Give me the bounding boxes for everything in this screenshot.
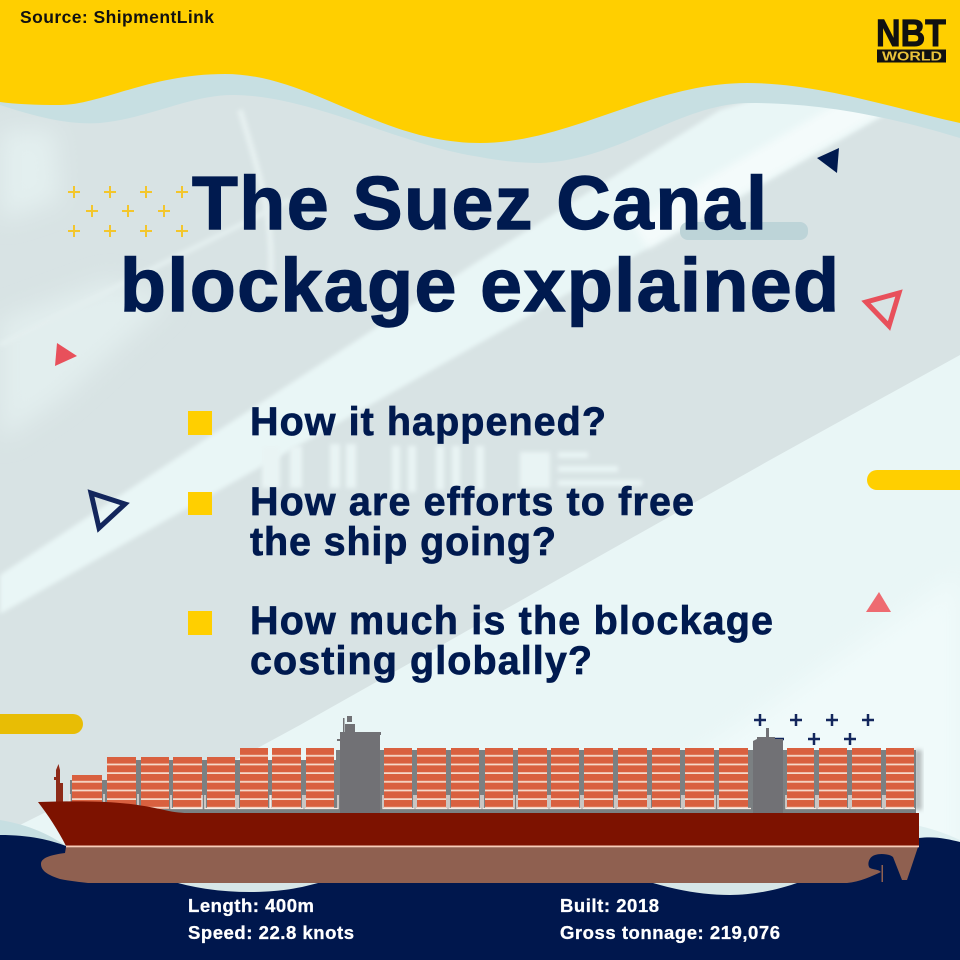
- deck base: [70, 750, 916, 813]
- navy sea: [0, 835, 960, 960]
- logo: NBT World: WORLD: [882, 50, 942, 64]
- bridge tower: [337, 716, 381, 813]
- container frames: [70, 794, 915, 808]
- decoration: yellow pill left: [0, 714, 83, 734]
- waterline: [66, 846, 919, 847]
- container stacks: [72, 748, 914, 809]
- logo: NBT World: NBT: [876, 13, 946, 55]
- source credit: Source: ShipmentLink: [20, 7, 214, 27]
- title: blockage explained: [120, 243, 839, 327]
- question 1: How it happened?: [250, 400, 606, 444]
- triangle: red outline right: [866, 293, 899, 326]
- decoration: yellow plus grid: [68, 186, 188, 237]
- triangle: red filled left: [55, 343, 77, 366]
- ship specs: Gross tonnage: 219,076: [560, 922, 780, 943]
- bow mast: [54, 764, 63, 802]
- ship shadow: [914, 750, 922, 810]
- lower hull: [41, 847, 918, 883]
- decoration: navy plus grid: [754, 714, 874, 745]
- decoration: teal pill: [680, 222, 808, 240]
- stern water splash: [915, 825, 960, 850]
- question 2: [188, 480, 694, 564]
- ship specs: Built: 2018: [560, 895, 659, 916]
- funnel tower: [753, 728, 783, 813]
- wake highlights under hull: [178, 883, 797, 895]
- question list: [188, 400, 773, 683]
- question 3: [188, 599, 773, 683]
- ship specs: Speed: 22.8 knots: [188, 922, 354, 943]
- teal wave under header: [0, 60, 960, 163]
- question 2: How are efforts to free: [250, 480, 694, 524]
- title: [120, 161, 839, 327]
- ship: [38, 716, 922, 883]
- triangle: navy filled top right: [817, 148, 839, 173]
- bow water splash: [0, 820, 66, 846]
- yellow header wave: [0, 0, 960, 143]
- triangle: red filled right: [866, 592, 891, 612]
- question 3: costing globally?: [250, 639, 592, 683]
- decoration: yellow pill right: [867, 470, 960, 490]
- ship specs: Length: 400m: [188, 895, 314, 916]
- title: The Suez Canal: [192, 161, 767, 245]
- ship specs: [188, 895, 780, 943]
- rudder shaft: [882, 865, 883, 882]
- triangle: navy outline left: [91, 493, 125, 528]
- question 3: How much is the blockage: [250, 599, 773, 643]
- question 2: the ship going?: [250, 520, 556, 564]
- upper hull: [38, 801, 919, 846]
